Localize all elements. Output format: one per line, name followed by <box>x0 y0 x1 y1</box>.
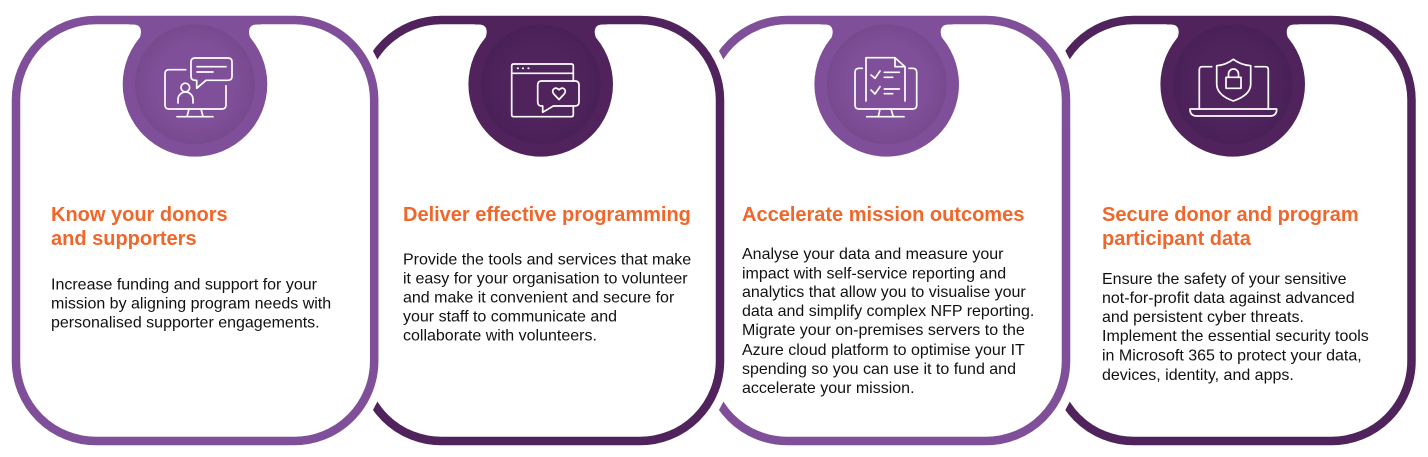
card outline 3 <box>707 20 1066 441</box>
heading 3: Accelerate mission outcomes <box>742 204 1024 226</box>
panel: secure donor and program participant data <box>1054 12 1412 441</box>
icon badge 1 <box>123 12 267 157</box>
panel: deliver effective programming <box>361 12 720 441</box>
body text 3: spending so you can use it to fund and <box>742 361 1016 378</box>
heading 1: and supporters <box>51 228 197 250</box>
body text 3: Analyse your data and measure your <box>742 246 1004 263</box>
card outline 2 <box>361 20 720 441</box>
body text 4: not-for-profit data against advanced <box>1102 290 1355 307</box>
card outline 4 <box>1054 20 1412 441</box>
body text 3: analytics that allow you to visualise your <box>742 284 1026 301</box>
icon badge 4 <box>1160 12 1305 157</box>
body text 4: in Microsoft 365 to protect your data, <box>1102 348 1362 364</box>
body text 1: mission by aligning program needs with <box>51 295 331 312</box>
icon: monitor with person and speech bubble <box>165 58 232 117</box>
icon: laptop with shield and lock <box>1190 59 1277 116</box>
panel: know your donors <box>16 12 374 441</box>
body text 3: data and simplify complex NFP reporting. <box>742 303 1034 320</box>
body text 2: and make it convenient and secure for <box>403 290 675 307</box>
icon: browser window with heart message <box>512 64 579 117</box>
heading 1: Know your donors <box>51 204 228 226</box>
icon badge 3 <box>814 12 959 157</box>
icon badge 2 <box>468 12 613 157</box>
heading 4: Secure donor and program <box>1102 204 1359 226</box>
body text 2: it easy for your organisation to volunteer <box>403 271 688 288</box>
body text 4: Ensure the safety of your sensitive <box>1102 271 1347 288</box>
body text 2: Provide the tools and services that make <box>403 251 691 268</box>
icon: monitor with checklist document <box>855 58 917 117</box>
body text 1: personalised supporter engagements. <box>51 314 320 331</box>
heading 2: Deliver effective programming <box>403 204 691 226</box>
body text 2: collaborate with volunteers. <box>403 328 597 345</box>
body text 3: Migrate your on-premises servers to the <box>742 322 1025 339</box>
heading 4: participant data <box>1102 228 1252 250</box>
panel: accelerate mission outcomes <box>707 12 1066 441</box>
body text 1: Increase funding and support for your <box>51 276 318 293</box>
body text 3: impact with self-service reporting and <box>742 265 1006 282</box>
card outline 1 <box>16 20 374 441</box>
body text 4: Implement the essential security tools <box>1102 328 1369 345</box>
body text 4: devices, identity, and apps. <box>1102 367 1294 384</box>
body text 3: Azure cloud platform to optimise your IT <box>742 342 1025 359</box>
body text 3: accelerate your mission. <box>742 380 915 397</box>
body text 2: your staff to communicate and <box>403 309 617 326</box>
body text 4: and persistent cyber threats. <box>1102 309 1304 326</box>
